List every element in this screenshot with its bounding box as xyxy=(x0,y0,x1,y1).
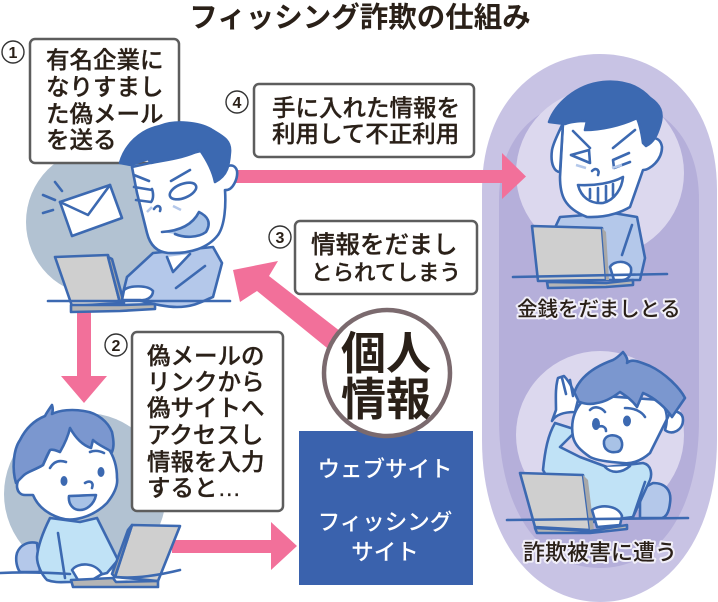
title: フィッシング詐欺の仕組み xyxy=(189,1,531,34)
callout 2: 情報を入力 xyxy=(147,449,264,475)
number 1 xyxy=(2,41,24,63)
callout 2: 偽メールの xyxy=(147,343,264,369)
number 2 xyxy=(105,334,127,356)
number 4: 4 xyxy=(233,95,242,112)
arrow: user to website xyxy=(172,522,297,570)
callout 2: すると… xyxy=(147,475,241,501)
icon: envelope xyxy=(43,182,122,236)
callout 1: た偽メール xyxy=(46,101,164,127)
personal information circle: 個人 xyxy=(341,328,431,379)
personal information circle: 情報 xyxy=(341,374,431,425)
number 1: 1 xyxy=(9,45,18,62)
arrow 2: down to user xyxy=(61,312,107,403)
illustration: victim troubled xyxy=(507,352,688,533)
callout 2: 偽サイトへ xyxy=(147,395,264,421)
callout 3 xyxy=(295,221,477,294)
phishing website box xyxy=(299,431,473,585)
illustration: user with laptop xyxy=(0,405,180,587)
callout 4: 利用して不正利用 xyxy=(272,121,459,147)
illustration: sender with laptop xyxy=(43,123,237,312)
callout 3: 情報をだまし xyxy=(311,231,458,259)
number 2: 2 xyxy=(112,338,121,355)
number 3: 3 xyxy=(276,230,285,247)
callout 3: とられてしまう xyxy=(311,261,461,285)
callout 2: リンクから xyxy=(147,369,264,395)
label: take money: 金銭をだましとる xyxy=(517,298,681,321)
arrow 3: info to sender xyxy=(233,261,345,352)
callout 1: 有名企業に xyxy=(46,47,164,73)
number 3 xyxy=(269,226,291,248)
illustration: criminal laughing xyxy=(513,82,667,288)
callout 1 xyxy=(30,39,179,163)
callout 2 xyxy=(132,332,283,511)
callout 1: なりすまし xyxy=(46,74,164,100)
callout 4 xyxy=(254,84,474,157)
callout 2: アクセスし xyxy=(147,422,263,448)
panel: victim capsule xyxy=(482,54,717,602)
gray circle behind sender xyxy=(26,148,174,296)
label: fraud damage: 詐欺被害に遭う xyxy=(523,540,677,565)
callout 1: を送る xyxy=(46,127,116,153)
personal information circle xyxy=(324,310,450,436)
phishing website box: ウェブサイト xyxy=(317,456,453,482)
callout 4: 手に入れた情報を xyxy=(272,95,460,121)
phishing website box: サイト xyxy=(351,540,419,565)
number 4 xyxy=(226,91,248,113)
phishing website box: フィッシング xyxy=(318,510,452,535)
laptop xyxy=(55,255,120,306)
arrow 4: to criminal xyxy=(236,153,526,199)
gray circle behind user xyxy=(4,413,166,575)
